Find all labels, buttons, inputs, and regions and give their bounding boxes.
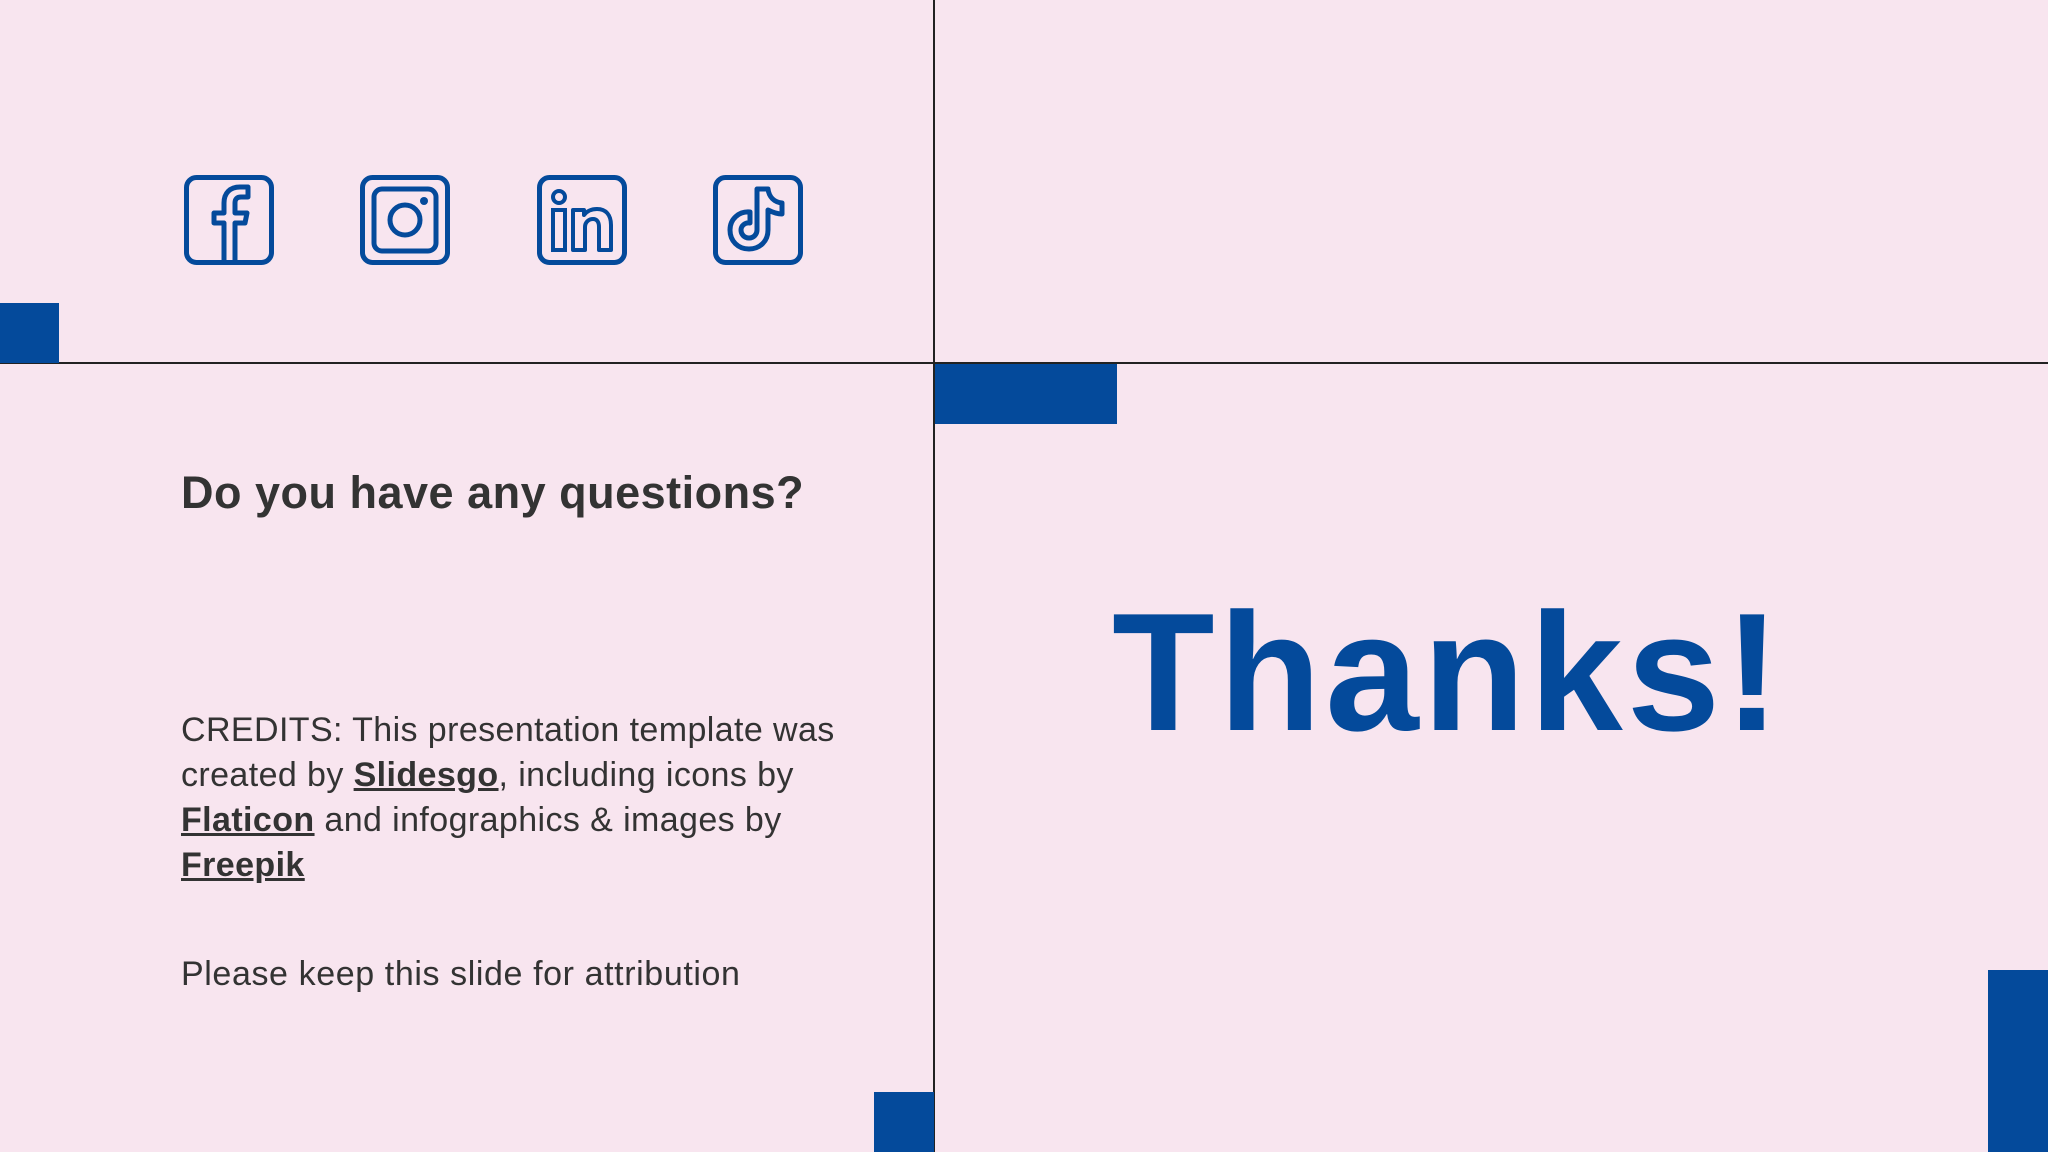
text block: attribution: Please keep this slide for attribution xyxy=(181,955,741,993)
text block: credits: CREDITS: This presentation template was created by Slidesgo, including icons by Flaticon and infographics & images by Freepik xyxy=(181,711,835,884)
blue square top-left xyxy=(0,303,59,363)
title: Thanks: Thanks! xyxy=(1112,578,1784,766)
icon: facebook xyxy=(184,175,274,265)
icon: linkedin xyxy=(537,175,627,265)
heading: questions: Do you have any questions? xyxy=(181,467,804,518)
blue rectangle center xyxy=(935,364,1117,424)
blue bar bottom-right xyxy=(1988,970,2048,1152)
icon: instagram xyxy=(360,175,450,265)
blue square bottom xyxy=(874,1092,934,1152)
icon: tiktok xyxy=(713,175,803,265)
